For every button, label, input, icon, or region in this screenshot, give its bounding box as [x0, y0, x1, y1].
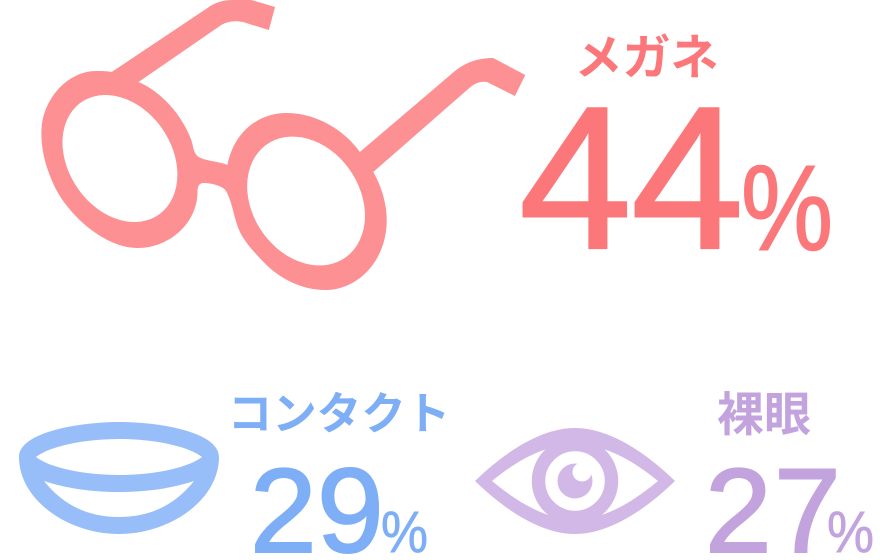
label: glasses: メガネ [574, 32, 719, 85]
icon: contact lens [19, 422, 219, 534]
value: glasses 44%: % [741, 140, 833, 276]
value: naked eye 27% [705, 444, 874, 560]
icon: eye [475, 428, 675, 534]
icon: glasses [39, 0, 525, 290]
label: contact lens: コンタクト [228, 390, 450, 439]
label: naked eye: 裸眼 [717, 388, 811, 441]
value: glasses 44% [519, 65, 833, 292]
value: glasses 44%: 4 [631, 65, 744, 292]
value: glasses 44%: 4 [519, 65, 632, 292]
value: contact lens 29% [250, 444, 428, 560]
